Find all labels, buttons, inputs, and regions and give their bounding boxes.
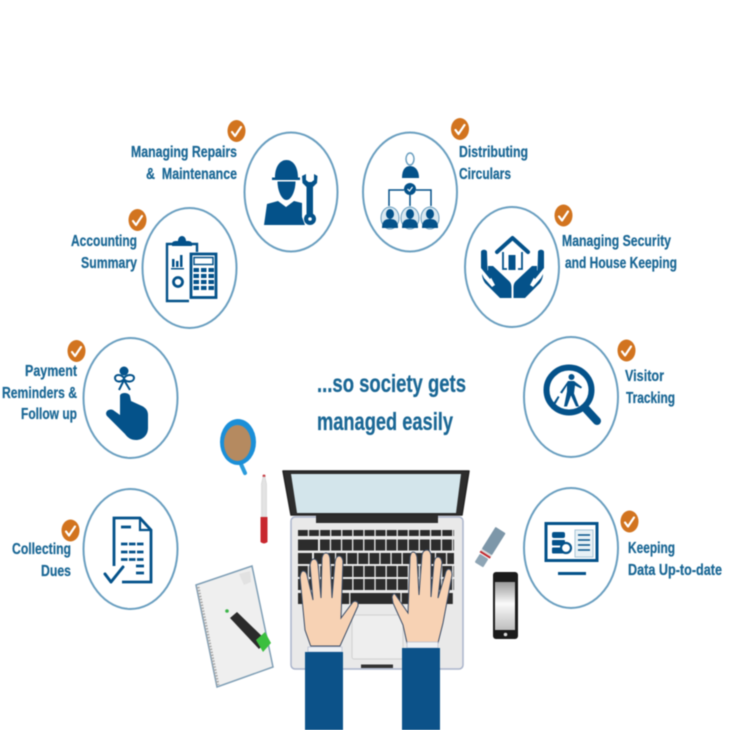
label: security [562, 233, 677, 272]
circle: accounting [142, 208, 236, 328]
keyboard [298, 533, 454, 598]
left hand and sleeve [300, 553, 358, 730]
label: repairs: Managing Repairs [131, 144, 237, 161]
touchpad [352, 615, 403, 659]
badge: visitor check [618, 340, 636, 362]
label: payment: Payment [25, 363, 78, 380]
circle: repairs [244, 132, 338, 252]
icon: hands holding house [481, 238, 544, 298]
label: dues [12, 541, 71, 580]
badge: circulars check [451, 118, 469, 140]
badge: repairs check [228, 120, 246, 142]
smartphone [493, 572, 518, 639]
label: repairs: & Maintenance [146, 166, 237, 183]
circle: keeping [524, 488, 618, 608]
badge: payment check [68, 340, 86, 362]
label: keeping [628, 540, 722, 579]
badge: accounting check [128, 209, 146, 231]
panel: keeping data up to date [524, 488, 722, 608]
label: dues: Dues [41, 563, 71, 580]
label: dues: Collecting [12, 541, 71, 558]
label: security: Managing Security [562, 233, 671, 250]
panel: collecting dues [12, 489, 178, 609]
circle: payment [84, 338, 178, 458]
icon: document with check mark [105, 518, 151, 582]
circle: circulars [363, 132, 457, 252]
icon: organisation chart [381, 153, 439, 229]
panel: payment reminders and follow up [2, 338, 178, 458]
label: circulars [459, 144, 528, 183]
badge: dues check [62, 520, 80, 542]
heading: so society gets managed easily [317, 370, 466, 436]
label: keeping: Keeping [628, 540, 675, 557]
front notch [361, 664, 393, 668]
label: accounting: Summary [81, 255, 137, 272]
label: payment [2, 363, 78, 423]
icon: worker with wrench [264, 160, 318, 225]
label: accounting: Accounting [71, 233, 137, 250]
label: security: and House Keeping [565, 255, 677, 272]
coffee cup [220, 419, 256, 473]
laptop lid [283, 471, 469, 515]
laptop base [291, 517, 463, 669]
notebook with highlighter [196, 566, 273, 687]
label: accounting [71, 233, 137, 272]
highlighter [225, 609, 271, 652]
circle: dues [84, 489, 178, 609]
icon: clipboard and calculator [167, 236, 216, 301]
pen [260, 474, 268, 544]
heading: so society gets managed easily: managed easily [317, 408, 453, 436]
usb drive [474, 527, 506, 568]
panel: distributing circulars [363, 118, 528, 252]
heading: so society gets managed easily: ...so society gets [317, 370, 466, 398]
hinge [316, 515, 438, 523]
laptop screen [291, 474, 461, 513]
icon: monitor with database and document [546, 524, 597, 575]
panel: managing repairs and maintenance [131, 120, 338, 252]
label: visitor: Visitor [625, 368, 664, 385]
label: payment: Reminders & [2, 385, 77, 402]
icon: finger with tied ribbon [106, 366, 148, 440]
circle: visitor [524, 337, 618, 457]
panel: accounting summary [71, 208, 236, 328]
panel: managing security and house keeping [465, 204, 677, 327]
circle: security [465, 207, 559, 327]
label: payment: Follow up [21, 406, 77, 423]
laptop [283, 471, 469, 669]
badge: security check [554, 204, 572, 226]
label: visitor: Tracking [626, 390, 675, 407]
icon: magnifier with traveller [546, 368, 597, 421]
label: repairs [131, 144, 237, 183]
panel: visitor tracking [524, 337, 675, 457]
badge: keeping check [620, 510, 638, 532]
label: visitor [625, 368, 675, 407]
label: circulars: Circulars [459, 166, 511, 183]
right hand and sleeve [392, 550, 452, 730]
label: circulars: Distributing [459, 144, 528, 161]
